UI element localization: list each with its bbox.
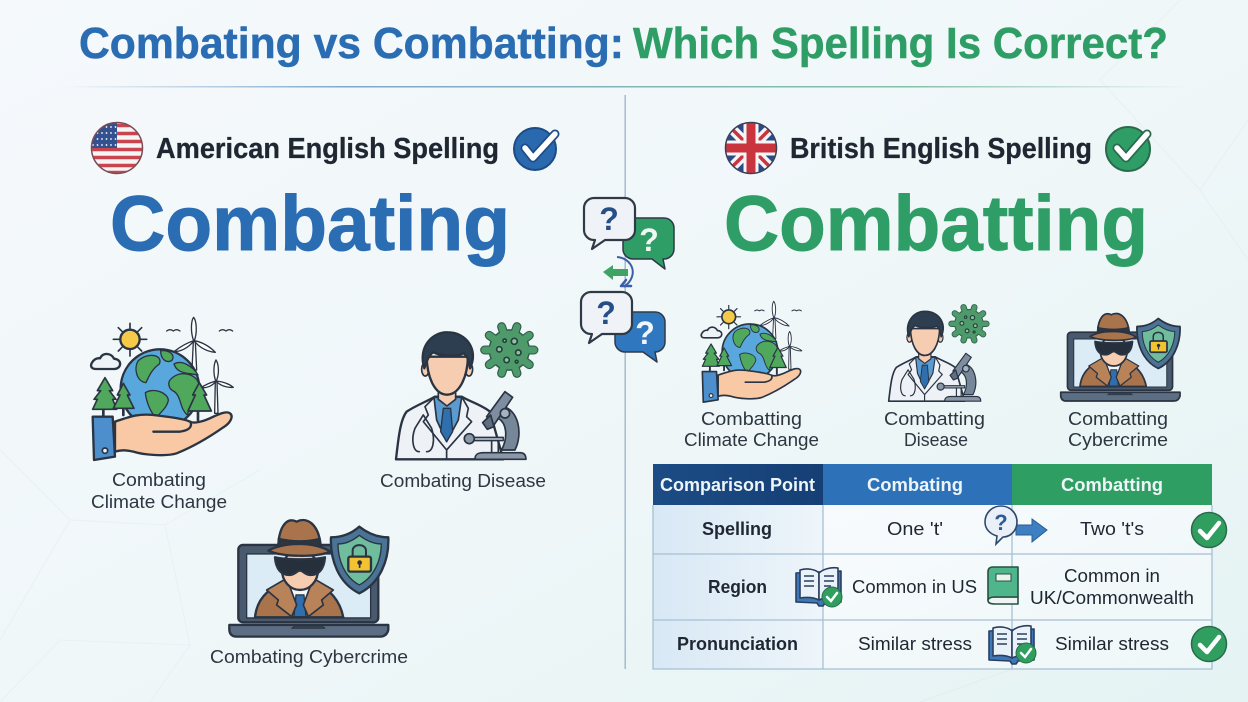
row: Pronunciation <box>677 634 1169 654</box>
panel: British English <box>684 121 1180 450</box>
row: Pronunciation: Pronunciation <box>677 634 798 654</box>
icon: green check <box>1106 127 1150 171</box>
table body grid <box>653 505 1212 669</box>
row: Spelling: One 't' <box>887 519 943 539</box>
table header row: Combating <box>867 475 963 495</box>
icon: doctor small <box>889 307 986 401</box>
title <box>79 19 1168 68</box>
icon: blue check <box>514 128 556 170</box>
row: Region <box>708 566 1194 608</box>
icon: spy on laptop with shield <box>229 520 388 637</box>
icon: center question bubbles and exchange arrows: ? <box>639 222 659 258</box>
big word: Combating: Combating <box>110 179 510 267</box>
label: Combatting Climate Change <box>684 408 819 450</box>
center divider <box>624 95 626 669</box>
row: Spelling: Spelling <box>702 519 772 539</box>
icon: center question bubbles and exchange arrows: ? <box>599 201 619 237</box>
table header row <box>653 464 1212 505</box>
row: Region: Common in US <box>852 577 977 597</box>
label: Combating Cybercrime: Combating Cybercrime <box>210 646 408 667</box>
label: Combatting Disease: Disease <box>904 429 968 450</box>
comparison table <box>653 464 1226 669</box>
table header row: Comparison Point <box>660 475 815 495</box>
icon: doctor with microscope and virus <box>396 327 534 459</box>
icon: center question bubbles and exchange arrows: ? <box>635 315 655 351</box>
table header row: Combatting <box>1061 475 1163 495</box>
label: Combating Climate Change: Climate Change <box>91 491 227 512</box>
heading: American English Spelling: American English Spelling <box>156 133 499 165</box>
panel: American English <box>90 121 556 667</box>
row: Spelling: Two 't's <box>1080 519 1144 539</box>
label: Combating Climate Change: Combating <box>112 469 206 490</box>
label: Combatting Cybercrime <box>1068 408 1168 450</box>
title: Which Spelling Is Correct? <box>633 19 1168 68</box>
label: Combatting Cybercrime: Combatting <box>1068 408 1168 429</box>
icon: climate change small <box>701 301 802 402</box>
title: Combating vs Combatting: <box>79 19 624 68</box>
icon: UK flag <box>724 121 778 175</box>
heading: British English Spelling: British English Spelling <box>790 133 1092 165</box>
icon: check pronunciation <box>1192 626 1226 662</box>
icon: open book region <box>796 568 842 607</box>
label: Combatting Climate Change: Climate Change <box>684 429 819 450</box>
big word: Combatting: Combatting <box>724 179 1148 267</box>
label: Combating Disease: Combating Disease <box>380 470 546 491</box>
icon: question and arrow: ? <box>994 510 1008 535</box>
icon: climate change hand and globe <box>91 317 233 460</box>
row: Region: Region <box>708 577 767 597</box>
icon: spy small <box>1061 314 1180 401</box>
icon: center question bubbles and exchange arrows: ? <box>596 295 616 331</box>
label: Combatting Disease <box>884 408 985 450</box>
row: Pronunciation: Similar stress <box>858 634 972 654</box>
icon: center question bubbles and exchange arrows <box>581 198 674 362</box>
label: Combatting Cybercrime: Cybercrime <box>1068 429 1168 450</box>
icon: US flag <box>90 121 144 175</box>
row: Pronunciation: Similar stress <box>1055 634 1169 654</box>
icon: open book pronunciation <box>989 626 1036 664</box>
header rule <box>60 86 1190 88</box>
label: Combatting Disease: Combatting <box>884 408 985 429</box>
icon: check spelling <box>1192 512 1226 548</box>
row: Spelling <box>702 519 1144 539</box>
label: Combating Climate Change <box>91 469 227 512</box>
row: Region: UK/Commonwealth <box>1030 588 1194 608</box>
row: Region: Common in <box>1064 566 1160 586</box>
icon: green book <box>988 567 1018 604</box>
label: Combatting Climate Change: Combatting <box>701 408 802 429</box>
icon: question and arrow <box>985 506 1047 544</box>
